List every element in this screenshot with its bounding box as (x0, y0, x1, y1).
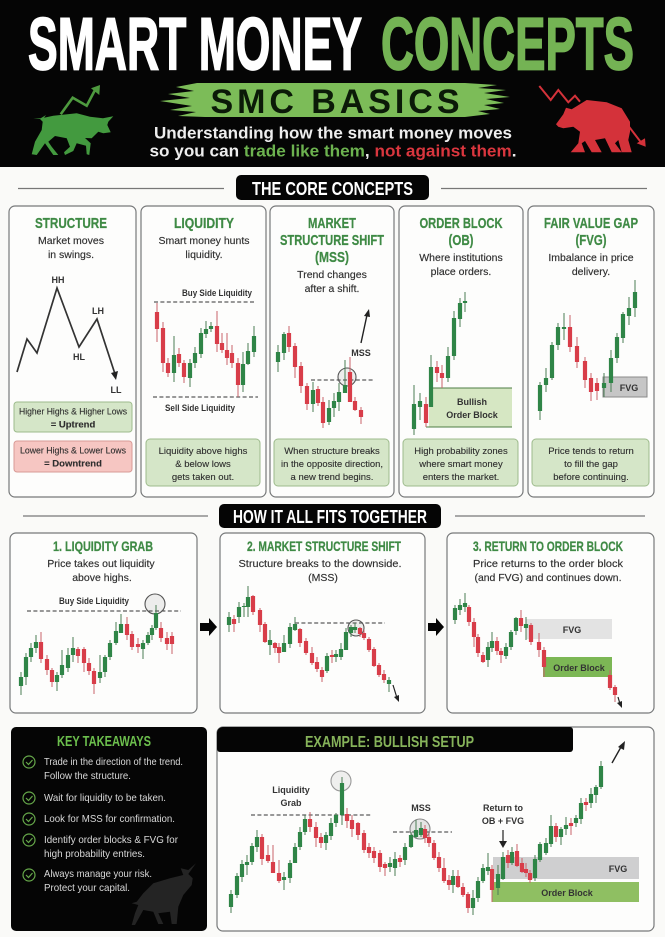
text: step 3 (473, 558, 624, 584)
label: order block: Order Block (541, 888, 594, 898)
callout: fvg: Price tends to return (548, 446, 634, 457)
panel: fair value gap (528, 206, 654, 497)
subtitle (150, 124, 516, 160)
chart: step 2 candles (229, 586, 399, 702)
arrow: continuation up (612, 741, 625, 763)
banner: SMC BASICS: SMC BASICS (210, 83, 460, 121)
chart: swing line (17, 275, 122, 395)
callout: liquidity: gets taken out. (172, 472, 234, 483)
arrow: return to order block (499, 830, 507, 848)
chart: liquidity candles: Sell Side Liquidity (165, 403, 235, 413)
list: takeaways: Follow the structure. (44, 771, 131, 782)
text: smart money hunts (158, 235, 250, 261)
callout: mss: When structure breaks (284, 446, 380, 457)
chart: liquidity candles: Buy Side Liquidity (182, 288, 252, 298)
panel: liquidity (141, 206, 266, 497)
list: takeaways: Trade in the direction of the trend. (44, 757, 183, 768)
callout: fvg: before continuing. (553, 472, 629, 483)
heading: the core concepts (18, 175, 647, 200)
label: liquidity grab: Liquidity (272, 785, 310, 795)
text: smart money hunts: Smart money hunts (158, 235, 250, 247)
callout: uptrend (14, 402, 132, 432)
heading: order block: ORDER BLOCK (420, 215, 503, 232)
list: takeaways: Look for MSS for confirmation. (44, 814, 175, 825)
callout: downtrend: Lower Highs & Lower Lows (20, 446, 126, 456)
heading: order block (420, 215, 503, 249)
callout: liquidity (146, 439, 260, 486)
arrow: step 1 to step 2 (200, 618, 217, 636)
text: where institutions: Where institutions (419, 252, 503, 264)
callout: downtrend (14, 441, 132, 472)
chart: fvg candles (540, 280, 647, 420)
chart: swing line: HH (52, 275, 64, 285)
callout: fvg: to fill the gap (564, 459, 618, 470)
label: fvg: FVG (609, 864, 627, 874)
chart: order block candles (414, 292, 512, 435)
chart: step 3 candles (455, 593, 622, 708)
heading: mss (280, 215, 384, 266)
heading: step 2: 2. MARKET STRUCTURE SHIFT (247, 538, 401, 554)
chart: mss candles: MSS (351, 348, 371, 358)
heading: mss: STRUCTURE SHIFT (280, 232, 384, 249)
callout: order block: where smart money (418, 459, 503, 470)
heading: liquidity: LIQUIDITY (174, 215, 234, 232)
panel: order block (399, 206, 523, 497)
text: where institutions: place orders. (431, 266, 491, 278)
chart: liquidity grab candles: Buy Side Liquidity (59, 596, 129, 606)
label: liquidity grab: Grab (280, 798, 302, 808)
panel: 2 market structure shift (220, 533, 425, 713)
text: market moves: in swings. (48, 249, 94, 261)
icon: bear with falling arrow (539, 86, 646, 152)
label: mss: MSS (411, 803, 431, 813)
list: takeaways (23, 756, 183, 894)
title: SMART MONEY (28, 2, 362, 85)
heading: mss: (MSS) (315, 249, 349, 266)
list: takeaways: Protect your capital. (44, 883, 130, 894)
label: return to ob + fvg (482, 803, 524, 826)
panel: 3 return to order block (447, 533, 654, 713)
panel: example bullish setup (217, 727, 654, 931)
heading: how it all fits together (23, 504, 645, 528)
text: smart money hunts: liquidity. (185, 249, 223, 261)
callout: mss: in the opposite direction, (281, 459, 383, 470)
callout: mss (274, 439, 389, 486)
callout: liquidity: & below lows (175, 459, 231, 470)
arrow: step 2 to step 3 (428, 618, 444, 636)
heading: how it all fits together: HOW IT ALL FITS TOGETHER (233, 507, 427, 527)
chart: order block candles: Bullish (457, 397, 487, 407)
text: imbalance: delivery. (572, 266, 610, 278)
heading: structure: STRUCTURE (35, 215, 107, 232)
text: market moves: Market moves (38, 235, 104, 247)
label: return to ob + fvg: Return to (483, 803, 523, 813)
text: trend changes (297, 269, 367, 295)
text: trend changes: after a shift. (305, 283, 359, 295)
text: step 2 (238, 558, 402, 584)
callout: uptrend: = Uptrend (51, 420, 95, 430)
text: step 1: above highs. (72, 572, 132, 584)
text: step 1 (47, 558, 155, 584)
chart: swing line: LH (92, 306, 104, 316)
callout: fvg (532, 439, 649, 486)
chart: bullish setup candles (231, 761, 639, 915)
heading: key takeaways: KEY TAKEAWAYS (57, 733, 151, 750)
header band (0, 0, 665, 167)
heading: fvg: (FVG) (576, 232, 607, 249)
icon: faded bull (132, 863, 196, 925)
chart: order block candles: Order Block (446, 410, 499, 420)
panel: market structure shift (270, 206, 394, 497)
text: step 2: Structure breaks to the downside. (238, 558, 402, 570)
chart: liquidity candles (153, 288, 258, 413)
text: step 3: Price returns to the order block (473, 558, 624, 570)
chart: mss candles (278, 309, 375, 428)
panel: 1 liquidity grab (10, 533, 197, 713)
text: where institutions (419, 252, 503, 278)
label: liquidity grab (272, 785, 310, 808)
panel: structure (9, 206, 136, 497)
heading: step 1: 1. LIQUIDITY GRAB (53, 538, 153, 554)
callout: order block (403, 439, 518, 486)
icon: bull with rising arrow (32, 85, 113, 155)
callout: mss: a new trend begins. (291, 472, 373, 483)
chart: step 3 candles: FVG (563, 625, 581, 635)
text: imbalance (548, 252, 634, 278)
list: takeaways: Identify order blocks & FVG for (44, 835, 179, 846)
heading: example: EXAMPLE: BULLISH SETUP (305, 734, 474, 751)
chart: swing line: HL (73, 352, 85, 362)
callout: order block: High probability zones (414, 446, 508, 457)
text: step 1: Price takes out liquidity (47, 558, 155, 570)
text: step 3: (and FVG) and continues down. (474, 572, 622, 584)
text: step 2: (MSS) (308, 572, 338, 584)
text: market moves (38, 235, 104, 261)
text: trend changes: Trend changes (297, 269, 367, 281)
callout: downtrend: = Downtrend (44, 458, 102, 470)
list: takeaways: Always manage your risk. (44, 869, 152, 880)
heading: order block: (OB) (448, 232, 474, 249)
subtitle: so you can trade like them, not against them. (150, 142, 516, 160)
heading: example (217, 727, 573, 752)
callout: uptrend: Higher Highs & Higher Lows (19, 406, 127, 418)
subtitle: Understanding how the smart money moves (154, 124, 512, 142)
callout: order block: enters the market. (423, 472, 499, 483)
heading: fvg (544, 215, 638, 249)
chart: swing line: LL (110, 385, 122, 395)
heading: fvg: FAIR VALUE GAP (544, 215, 638, 232)
chart: fvg candles: FVG (620, 383, 638, 393)
text: imbalance: Imbalance in price (548, 252, 634, 264)
chart: step 3 candles: Order Block (553, 663, 606, 673)
chart: liquidity grab candles (21, 594, 181, 695)
list: takeaways: high probability entries. (44, 849, 145, 860)
panel: key takeaways (11, 727, 207, 931)
heading: mss: MARKET (308, 215, 356, 232)
list: takeaways: Wait for liquidity to be taken. (44, 793, 166, 804)
callout: liquidity: Liquidity above highs (159, 446, 248, 457)
heading: the core concepts: THE CORE CONCEPTS (252, 179, 413, 199)
label: return to ob + fvg: OB + FVG (482, 816, 524, 826)
